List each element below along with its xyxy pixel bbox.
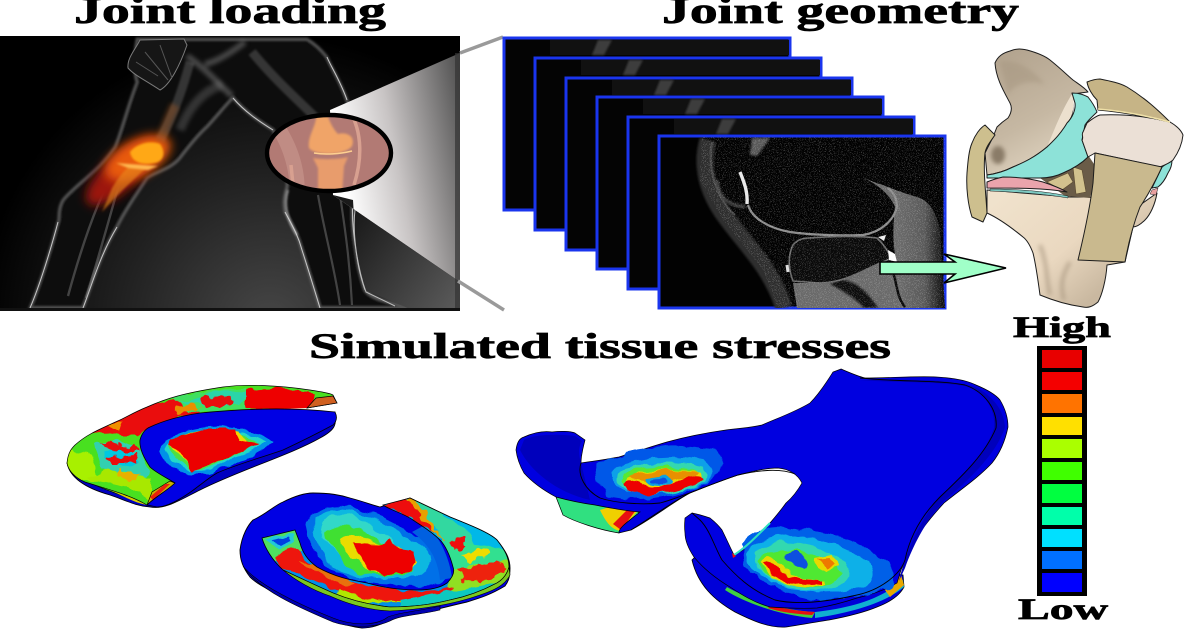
MRI slice 1 [504,38,790,210]
chart: femoral cartilage stress map [516,369,1008,627]
side tendon [967,125,995,222]
tibial underlay, upper [556,497,639,533]
meniscus: pink [987,177,1067,192]
tibia outline [789,236,892,283]
meniscus rim [283,567,510,611]
MRI slice 2 [535,58,821,230]
MRI slice 5 [628,117,914,289]
icon: shin bones [67,194,118,298]
cartilage contours [307,506,448,586]
lower shaded wedge [333,195,460,311]
MRI slice 4 [597,97,883,269]
icon: thigh bones [160,52,316,140]
meniscus C [262,498,509,607]
chart: lower tibial plateau stress map [240,490,520,628]
fat region [793,173,945,308]
patellar tendon [1078,153,1162,262]
dark joint gap [1040,155,1098,198]
femur [985,49,1088,175]
label: Low: Low [1018,593,1109,626]
chart: upper-left tibial plateau stress map [66,385,338,508]
panel: MRI slice stack [504,38,945,308]
icon: hand [128,39,187,90]
femoral inner contour lines [580,378,996,603]
panel: joint loading photo [0,36,460,311]
contact hot spot [160,427,273,474]
tibia [987,190,1157,307]
cartilage: cyan [987,93,1097,178]
MRI slice 3 [566,78,852,250]
speckle noise [700,137,945,308]
cone of magnification [330,53,460,282]
callout: magnified knee circle [267,110,391,195]
quadriceps tendon [1087,79,1170,122]
legend: stress colour scale [1037,346,1087,596]
patella fat pad highlight [740,172,747,204]
femoral left contact hot spot [595,446,724,499]
arrow: MRI to 3D model [880,254,1006,283]
icon: 3D knee model [967,49,1183,307]
base plate [240,493,510,628]
femoral rim shading [520,380,1005,581]
femoral shell [516,369,1008,608]
icon: translucent legs silhouette [30,39,408,308]
patella: pale [1082,115,1183,167]
meniscus surface [67,386,333,504]
tibial underlay, lower [692,552,904,627]
zoom guide lines [458,37,504,310]
label: High: High [1013,311,1111,344]
underside [67,412,336,508]
MRI slice 6: front sagittal knee scan [659,136,945,308]
skin band [705,140,784,308]
blue cartilage [140,409,336,507]
heading: simulated tissue stresses: Simulated tissue stresses [309,326,891,366]
icon: glowing knee [76,105,178,215]
femoral lower contact hot spot [742,527,894,600]
femur outline [748,188,897,235]
